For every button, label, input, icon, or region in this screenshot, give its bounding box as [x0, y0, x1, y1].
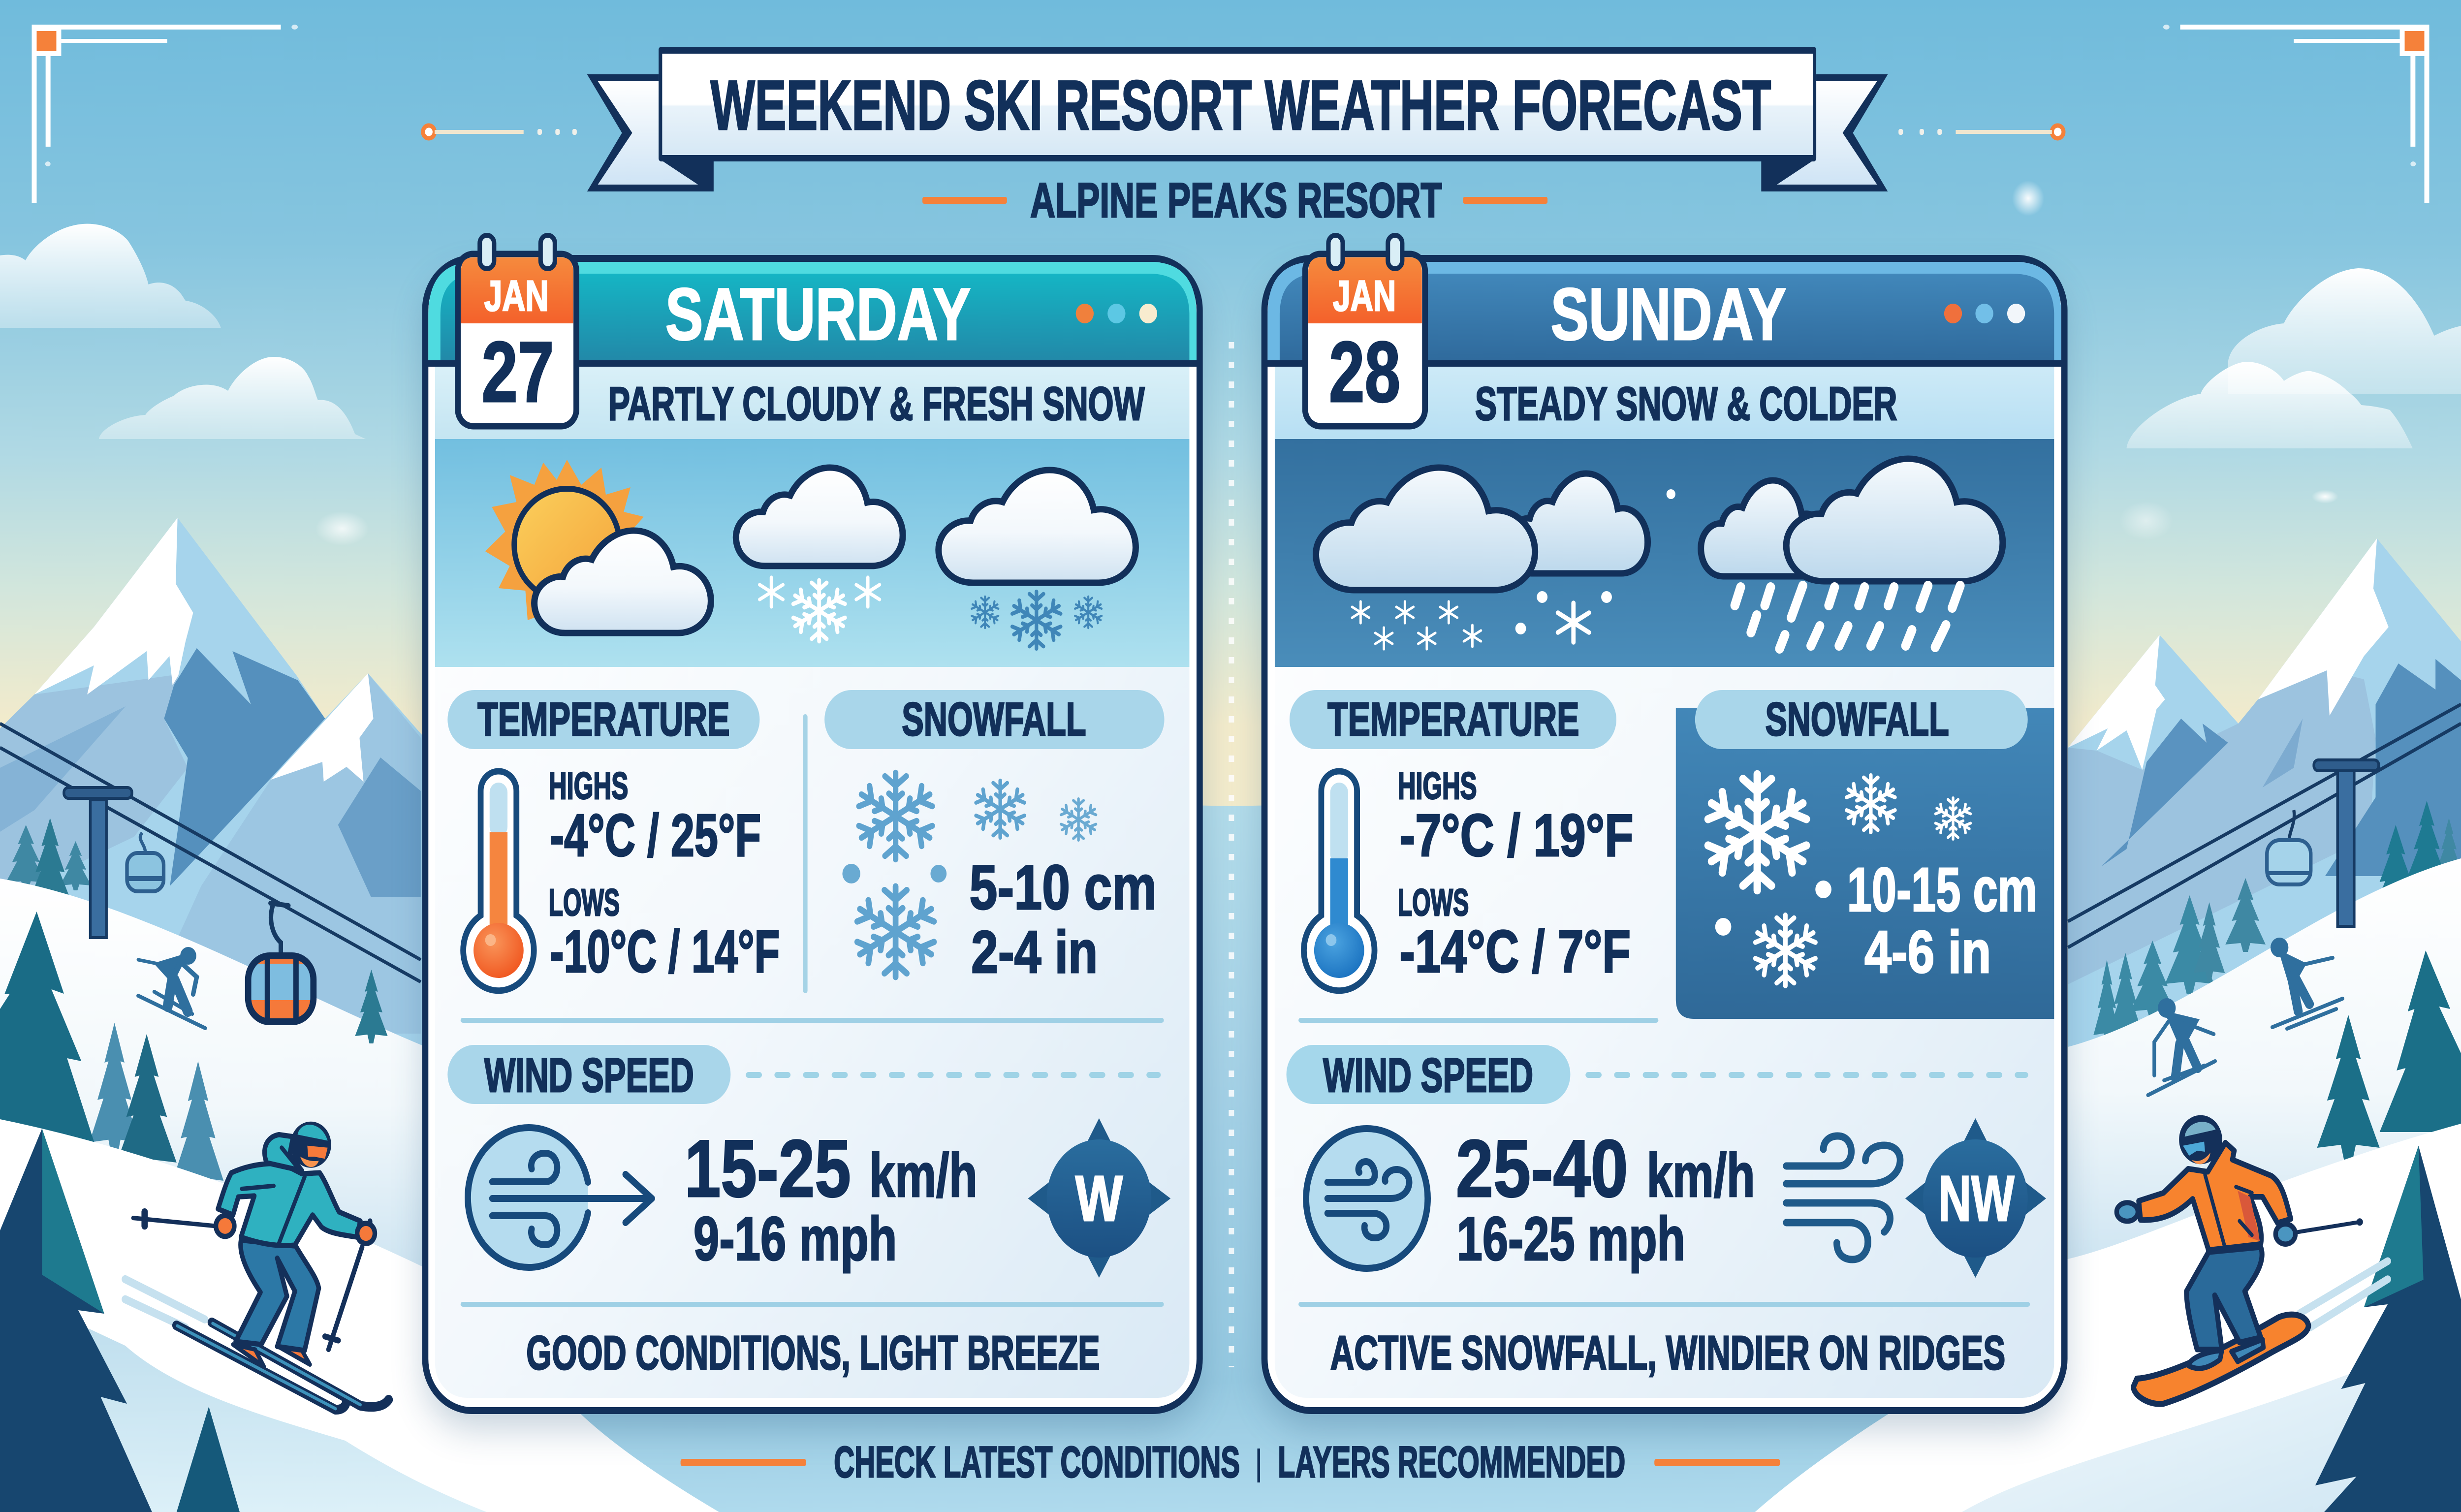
poles — [133, 1212, 370, 1350]
summary text: GOOD CONDITIONS, LIGHT BREEZE — [526, 1326, 1100, 1380]
header bar — [425, 262, 1199, 367]
column divider — [803, 714, 808, 993]
snowboarder — [2116, 1115, 2388, 1404]
title banner — [587, 47, 1888, 191]
conditions band — [1275, 367, 2054, 439]
snowfall values: 2-4 in — [971, 918, 1098, 985]
lift pylon left — [64, 788, 132, 938]
summary text: ACTIVE SNOWFALL, WINDIER ON RIDGES — [1330, 1326, 2005, 1380]
center dotted divider — [1229, 342, 1234, 1367]
conditions band — [435, 367, 1189, 439]
snow slope left — [0, 879, 429, 1290]
conditions text: STEADY SNOW & COLDER — [1475, 378, 1897, 430]
icon: thermometer warm — [463, 771, 534, 991]
helmet and face — [290, 1122, 331, 1168]
mid trees left — [0, 912, 388, 1194]
icon: white snowflakes — [1704, 774, 1972, 986]
calendar icon: JAN — [1333, 272, 1396, 320]
temperature values — [549, 764, 780, 985]
corner ornament left — [32, 25, 298, 203]
icon: compass W — [1028, 1118, 1170, 1278]
right mountains — [2068, 538, 2461, 1083]
inner panel — [1275, 367, 2054, 1398]
icon: compass W: W — [1075, 1163, 1123, 1234]
bottom tree left — [177, 1407, 240, 1512]
footer note: LAYERS RECOMMENDED — [1278, 1438, 1625, 1487]
wind values — [685, 1123, 978, 1273]
snowfall heading: SNOWFALL — [902, 693, 1086, 746]
card body — [425, 258, 1199, 1411]
main skier — [125, 1122, 389, 1410]
footer note: CHECK LATEST CONDITIONS — [834, 1438, 1240, 1487]
icon: snow cloud with white flakes — [736, 468, 903, 641]
temperature values: LOWS — [1398, 881, 1469, 924]
header bar — [1264, 262, 2064, 367]
temperature values: -10°C / 14°F — [550, 917, 780, 985]
foreground snow left — [0, 1119, 760, 1512]
card shadow — [425, 276, 1199, 1428]
wind values: km/h — [869, 1141, 978, 1210]
header dots — [1076, 304, 1157, 323]
sky sparkles — [315, 181, 2338, 546]
icon: compass NW — [1905, 1118, 2046, 1278]
temperature values: -7°C / 19°F — [1399, 801, 1633, 869]
icon: wind arrow — [468, 1128, 652, 1267]
divider — [1298, 1018, 1658, 1023]
big foreground tree right — [2315, 1146, 2461, 1512]
divider — [1298, 1302, 2030, 1307]
temperature heading: TEMPERATURE — [1327, 693, 1579, 746]
snowboard — [2133, 1315, 2308, 1404]
wind values — [1456, 1123, 1755, 1273]
jacket — [2139, 1143, 2291, 1250]
silhouette skier left — [138, 947, 205, 1028]
ribbon tail right — [1761, 74, 1888, 191]
icon: snow cloud with blue flakes — [939, 470, 1136, 649]
orange gondola — [248, 903, 315, 1025]
calendar icon — [1305, 235, 1425, 426]
chairlift cables right — [2068, 704, 2461, 947]
temperature values: -4°C / 25°F — [550, 801, 761, 869]
ribbon tail left — [587, 74, 714, 191]
panel: Sunday — [1264, 235, 2064, 1428]
title ornament left — [423, 126, 577, 138]
day name: SATURDAY — [665, 273, 971, 355]
snowfall heading: SNOWFALL — [1765, 693, 1949, 746]
temperature values: -14°C / 7°F — [1399, 917, 1631, 985]
gloves — [2116, 1203, 2296, 1244]
silhouette skier right lower — [2148, 998, 2215, 1095]
jacket details — [2238, 1191, 2260, 1241]
snowfall values — [969, 852, 1157, 985]
snowfall values: 5-10 cm — [969, 852, 1157, 922]
jacket — [218, 1164, 360, 1246]
left mountains — [0, 518, 429, 1083]
boots — [2188, 1339, 2263, 1368]
right background clouds — [2126, 268, 2461, 448]
icon: wind circle — [1306, 1129, 1428, 1268]
dashed rule — [1588, 1072, 2025, 1078]
panel: Saturday — [425, 235, 1199, 1428]
inner panel — [435, 367, 1189, 1398]
snowfall values: 10-15 cm — [1847, 855, 2037, 924]
snow slope right — [2068, 858, 2461, 1280]
header dots — [1944, 304, 2025, 323]
weather scene sky — [1275, 439, 2054, 667]
back trees right — [2093, 801, 2460, 1043]
foreground snow right — [1699, 1124, 2461, 1512]
card shadow — [1264, 276, 2064, 1428]
divider — [461, 1018, 1164, 1023]
lower snow shading right — [1962, 1329, 2461, 1512]
helmet and goggles — [2179, 1115, 2222, 1164]
corner ornament right — [2163, 25, 2429, 203]
temperature values: LOWS — [549, 881, 620, 924]
calendar icon — [458, 235, 576, 426]
temperature values: HIGHS — [549, 764, 628, 807]
skis — [177, 1323, 389, 1410]
card body — [1264, 258, 2064, 1411]
wind values: 25-40 — [1456, 1123, 1628, 1214]
snowfall highlight panel — [1676, 708, 2054, 1019]
snowfall heading — [824, 690, 1165, 749]
icon: compass NW: NW — [1938, 1163, 2014, 1234]
calendar icon: JAN — [484, 272, 549, 320]
calendar icon: 28 — [1329, 324, 1400, 420]
divider — [461, 1302, 1164, 1307]
small gondola right — [2267, 810, 2311, 884]
wind values: 15-25 — [685, 1123, 851, 1214]
icon: snow clouds — [1316, 468, 1675, 649]
weather scene sky — [435, 439, 1189, 667]
back trees left — [6, 818, 91, 912]
subtitle: resort name: ALPINE PEAKS RESORT — [1030, 173, 1442, 228]
wind values: km/h — [1647, 1141, 1755, 1210]
banner panel — [659, 47, 1816, 161]
temperature heading: TEMPERATURE — [477, 693, 730, 746]
icon: snowflakes — [842, 773, 1097, 977]
footer note — [681, 1438, 1780, 1487]
gloves — [216, 1216, 375, 1243]
icon: sun with cloud — [485, 460, 711, 633]
wind values: 16-25 mph — [1457, 1205, 1685, 1273]
left background clouds — [0, 224, 366, 439]
snowfall heading — [1695, 690, 2028, 749]
mid trees right — [2317, 950, 2461, 1163]
hood — [265, 1134, 302, 1171]
dashed rule — [749, 1072, 1158, 1078]
snowfall values: 4-6 in — [1864, 918, 1991, 985]
icon: wind gusts — [1786, 1136, 1900, 1260]
pants — [236, 1240, 319, 1351]
pole — [2298, 1218, 2363, 1232]
chairlift cables left — [0, 724, 421, 982]
ski tracks — [125, 1279, 205, 1327]
small gondola left — [127, 833, 163, 891]
lower snow shading left — [0, 1329, 486, 1512]
wind speed heading: WIND SPEED — [484, 1048, 694, 1102]
wind values: 9-16 mph — [694, 1205, 897, 1273]
calendar icon: 27 — [481, 324, 554, 420]
temperature values — [1398, 764, 1633, 985]
title ornament right — [1898, 126, 2063, 138]
title text: WEEKEND SKI RESORT WEATHER FORECAST — [710, 65, 1771, 144]
snowfall values — [1847, 855, 2037, 985]
wind speed heading: WIND SPEED — [1323, 1048, 1533, 1102]
pants — [2186, 1247, 2262, 1350]
silhouette skier right upper — [2271, 938, 2342, 1029]
jacket details — [242, 1148, 305, 1243]
icon: heavy snow clouds — [1701, 459, 2003, 649]
temperature values: HIGHS — [1398, 764, 1477, 807]
conditions text: PARTLY CLOUDY & FRESH SNOW — [608, 378, 1145, 430]
boots — [233, 1345, 310, 1367]
day name: SUNDAY — [1550, 273, 1786, 355]
big foreground tree left — [0, 1129, 152, 1512]
board tracks — [2300, 1261, 2388, 1327]
icon: thermometer cold — [1304, 771, 1375, 991]
lift pylon right — [2314, 760, 2379, 926]
center blue hill — [429, 788, 2061, 1512]
